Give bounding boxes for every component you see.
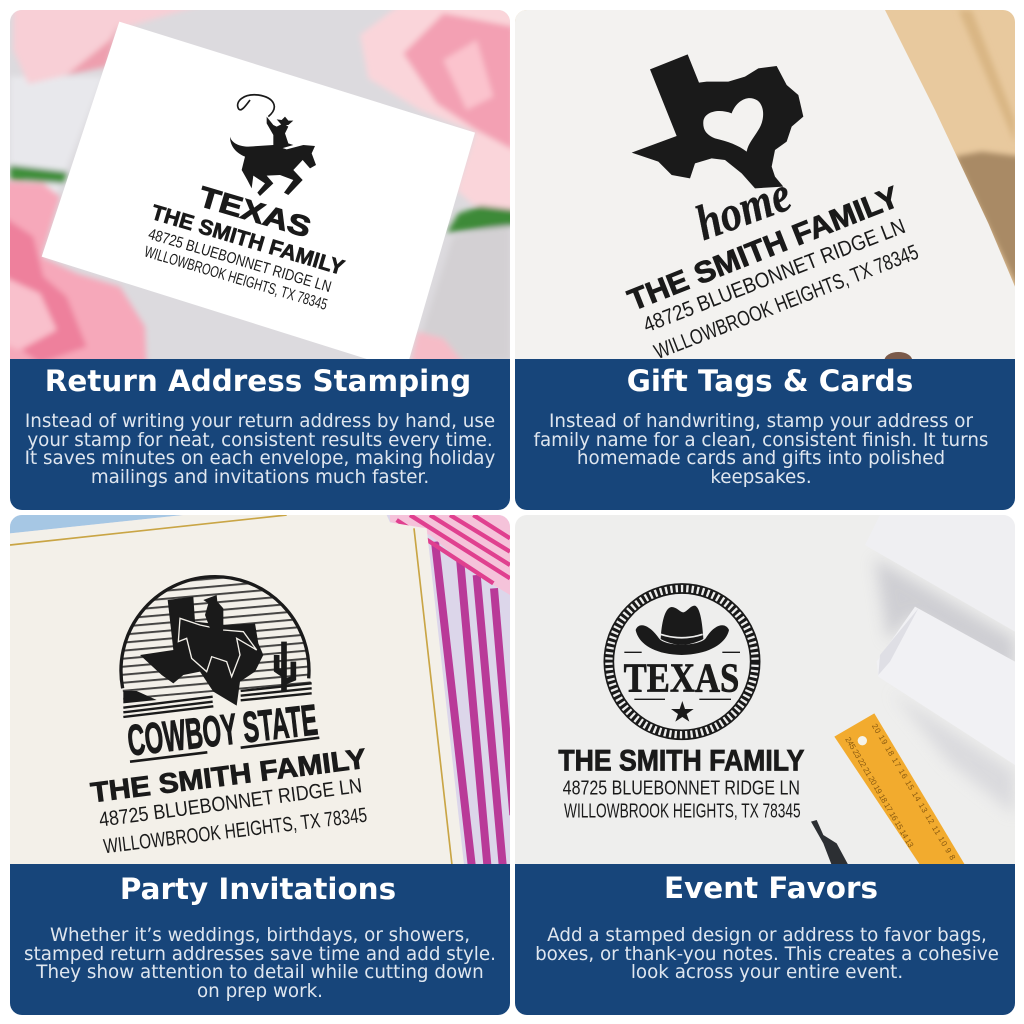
pen <box>811 820 848 865</box>
stamp: home script: home <box>688 165 798 251</box>
description: keepsakes. <box>710 467 812 488</box>
photo: stamped paper with rolls and ruler <box>515 515 1015 864</box>
description <box>535 925 999 983</box>
heading: Party Invitations <box>120 872 396 906</box>
description: They show attention to detail while cutting down <box>36 962 484 983</box>
description: look across your entire event. <box>631 962 903 983</box>
description: Whether it’s weddings, birthdays, or showers, <box>50 925 470 946</box>
description: Instead of writing your return address by hand, use <box>25 411 495 432</box>
stamp: address text: 48725 BLUEBONNET RIDGE LN <box>640 214 909 337</box>
stamp: cowboy on horse <box>230 95 316 196</box>
stamp: Texas round badge <box>604 584 760 739</box>
stamp: address text <box>558 745 805 823</box>
photo: stamped envelope on marble with peonies <box>10 10 510 359</box>
panel: event favors <box>515 515 1015 1015</box>
stamp: address text: WILLOWBROOK HEIGHTS, TX 78345 <box>564 800 801 823</box>
description: mailings and invitations much faster. <box>91 467 429 488</box>
panel: gift tags and cards <box>515 10 1015 510</box>
ruler: 20 19 18 17 16 15 14 13 12 11 10 9 8 <box>870 722 957 862</box>
panel: return address stamping <box>10 10 510 510</box>
ruler <box>834 713 965 865</box>
description: boxes, or thank-you notes. This creates a cohesive <box>535 944 999 965</box>
heading: Return Address Stamping <box>45 364 471 398</box>
info band <box>10 864 510 1015</box>
description: stamped return addresses save time and add style. <box>24 944 496 965</box>
heading: Event Favors <box>664 871 878 905</box>
panel: party invitations <box>10 515 510 1015</box>
stamp: address text: WILLOWBROOK HEIGHTS, TX 78345 <box>651 240 922 360</box>
info band <box>515 359 1015 510</box>
stamp: address text: TEXAS <box>195 181 314 244</box>
stamp: cowboy state badge <box>121 577 312 717</box>
photo: stamped white card on wood <box>515 10 1015 360</box>
stamp: address text: 48725 BLUEBONNET RIDGE LN <box>563 776 800 799</box>
stamp: cowboy state text <box>125 696 320 766</box>
description <box>534 411 988 488</box>
stamp: address text: THE SMITH FAMILY <box>89 743 368 808</box>
description: It saves minutes on each envelope, making holiday <box>25 448 495 469</box>
ruler: 245 23 22 21 20 19 18 17 16 15 14 13 <box>843 735 916 850</box>
info band <box>10 359 510 510</box>
info band <box>515 864 1015 1015</box>
stamp: Texas round badge: TEXAS <box>624 655 739 701</box>
stamp: address text: 48725 BLUEBONNET RIDGE LN <box>98 774 363 832</box>
stamp: address text: THE SMITH FAMILY <box>149 200 347 280</box>
stamp: Texas heart <box>632 54 803 188</box>
heading: Gift Tags & Cards <box>627 364 913 398</box>
description <box>24 925 496 1002</box>
stamp: address text <box>89 743 368 858</box>
stamp: address text: THE SMITH FAMILY <box>623 181 904 318</box>
description: your stamp for neat, consistent results every time. <box>27 430 493 451</box>
photo: stamped invitation with striped cloth <box>10 515 510 864</box>
stamp: address text: WILLOWBROOK HEIGHTS, TX 78345 <box>102 804 368 858</box>
stamp: address text <box>623 181 922 364</box>
stamp: address text: WILLOWBROOK HEIGHTS, TX 78345 <box>142 244 329 314</box>
description <box>25 411 495 488</box>
stamp: address text <box>142 181 347 314</box>
description: on prep work. <box>197 981 323 1002</box>
description: Add a stamped design or address to favor bags, <box>547 925 987 946</box>
stamp: cowboy state text: COWBOY STATE <box>125 696 320 766</box>
description: Instead of handwriting, stamp your address or <box>549 411 973 432</box>
description: family name for a clean, consistent finish. It turns <box>534 430 988 451</box>
stamp: address text: THE SMITH FAMILY <box>558 745 805 778</box>
stamp: address text: 48725 BLUEBONNET RIDGE LN <box>146 226 333 296</box>
description: homemade cards and gifts into polished <box>577 448 945 469</box>
